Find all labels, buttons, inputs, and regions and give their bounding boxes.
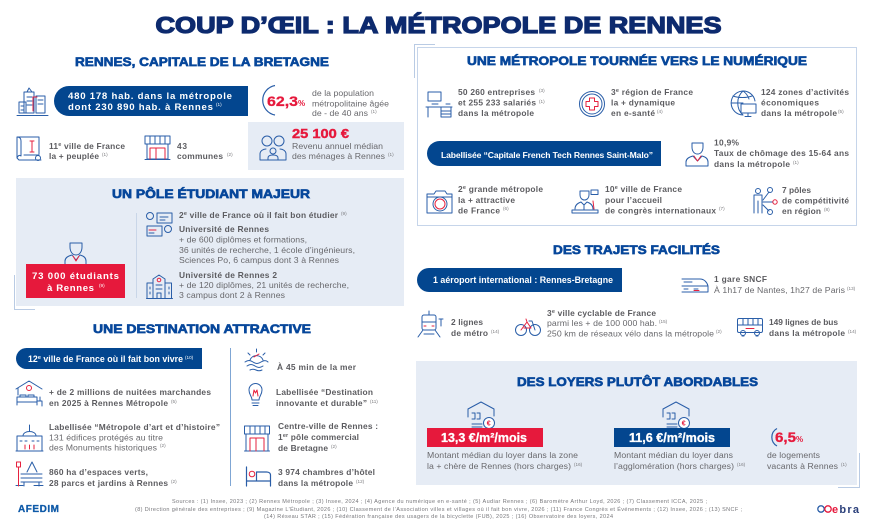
text: communes: communes xyxy=(177,151,223,161)
text: art et histoire: 131 édifices protégés au titre xyxy=(49,432,163,442)
text: entreprises: (1) xyxy=(539,99,545,104)
text: 11e ville: e xyxy=(58,142,61,148)
text: 25 100 €: (1) xyxy=(388,152,394,157)
banner: 12e ville: e xyxy=(38,355,41,361)
text: Université de Rennes: Sciences Po, 6 campus dont 3 à Rennes xyxy=(179,255,340,265)
text: agglomération: Montant médian du loyer dans xyxy=(614,450,734,460)
heading: trajets: DES TRAJETS FACILITÉS xyxy=(553,242,720,257)
stat: vélo xyxy=(516,308,722,338)
icon: bicycle xyxy=(516,319,540,336)
banner: population: (1) xyxy=(216,102,222,107)
logo: Cebra xyxy=(818,504,860,516)
callout: 73 000 étudiants: (9) xyxy=(99,283,105,288)
stat: centre-ville xyxy=(244,421,378,453)
text: 2e ville étudier: ville de France où il fait bon étudier xyxy=(187,210,339,220)
text: 25 100 €: Revenu annuel médian xyxy=(292,141,383,151)
stat: grande métropole xyxy=(427,184,543,216)
stat: métro xyxy=(418,311,500,338)
text: 2e ville étudier: 2 xyxy=(179,210,184,220)
heading: destination: UNE DESTINATION ATTRACTIVE xyxy=(93,322,311,336)
icon: high-speed train xyxy=(682,279,708,292)
stat: agglomération xyxy=(614,402,746,471)
stat: 6,5%: de logements xyxy=(767,450,821,460)
text: congrès: e xyxy=(615,185,618,191)
text: 2e ville étudier: e xyxy=(184,211,187,217)
text: métro: 2 lignes xyxy=(451,317,483,327)
text: vélo: e xyxy=(552,309,555,315)
text: congrès: ville de France xyxy=(618,184,682,194)
icon: camera xyxy=(427,191,452,213)
icon: student xyxy=(65,243,86,265)
text: grande métropole: e xyxy=(463,185,466,191)
stat: nuitées xyxy=(16,381,211,408)
icon: city buildings xyxy=(17,88,48,116)
stat: espaces verts xyxy=(16,462,177,488)
icon: metro xyxy=(418,311,443,337)
icon: park bench xyxy=(16,462,43,486)
text: pôles de compétitivité: 7 pôles xyxy=(782,185,811,195)
callout: 73 000 étudiants xyxy=(26,264,125,298)
text: agglomération: l’agglomération (hors charges) xyxy=(614,461,734,471)
stat: 62,3%: 62,3 xyxy=(267,93,298,109)
text: mer: À 45 min de la mer xyxy=(277,361,357,372)
text: e-santé: e xyxy=(616,88,619,94)
text: 11e ville: la + peuplée xyxy=(49,151,99,161)
text: pôles de compétitivité: en région xyxy=(782,206,821,216)
text: bus xyxy=(769,317,857,338)
text: grande métropole: de France xyxy=(458,206,500,216)
stat: mer xyxy=(245,349,357,372)
text: espaces verts xyxy=(49,467,177,488)
banner: French Tech: Labellisée “Capitale French Tech Rennes Saint-Malo” xyxy=(441,150,653,160)
stat: 62,3%: % xyxy=(298,99,305,108)
icon: blueprint xyxy=(17,137,41,160)
text: e-santé: 3 xyxy=(611,87,616,97)
text: chômage xyxy=(714,138,849,169)
text: chômage: dans la métropole xyxy=(714,159,790,169)
panel: Rennes, capitale de la Bretagne xyxy=(17,55,404,170)
text: art et histoire: des Monuments historiques xyxy=(49,442,158,452)
text: vélo xyxy=(547,308,722,338)
panel: Un pôle étudiant majeur xyxy=(14,178,404,310)
text: zones d'activités xyxy=(761,87,849,118)
text: entreprises xyxy=(458,87,545,118)
stat: pôles de compétitivité xyxy=(754,185,849,216)
panel: Une destination attractive xyxy=(16,322,378,488)
value: 13,3 €/m²/mois: 13,3 €/m²/mois xyxy=(441,431,527,445)
text: vélo: 3 xyxy=(547,308,552,318)
text: vélo: (15) xyxy=(659,319,668,324)
text: 25 100 € xyxy=(292,127,394,161)
icon: house with bed xyxy=(16,381,42,406)
text: e-santé xyxy=(611,87,693,118)
banner: 12e ville: ville de France où il fait bon vivre xyxy=(41,354,183,364)
logo: AFEDIM: AFEDIM xyxy=(18,504,59,515)
text: chômage: Taux de chômage des 15-64 ans xyxy=(714,148,849,158)
text: Université de Rennes 2: Université de Rennes 2 xyxy=(179,270,277,280)
text: grande métropole: la + attractive xyxy=(458,195,515,205)
stat: destination innovante xyxy=(249,384,378,408)
panel: revenu médian xyxy=(248,122,404,170)
stat: e-santé xyxy=(580,87,693,118)
icon: university building xyxy=(146,275,172,298)
text: zones d'activités: (5) xyxy=(838,109,844,114)
text: agglomération xyxy=(614,450,746,471)
text: Université de Rennes 2 xyxy=(179,270,349,300)
text: Université de Rennes xyxy=(179,224,355,265)
text: 25 100 €: 25 100 € xyxy=(292,127,349,141)
text: gare: 1 gare SNCF xyxy=(714,274,767,284)
icon: house with euro: € xyxy=(682,420,686,428)
banner: French Tech xyxy=(427,141,661,166)
title: COUP D’ŒIL : LA MÉTROPOLE DE RENNES xyxy=(156,11,722,38)
callout: 73 000 étudiants: à Rennes xyxy=(47,283,94,294)
text: art et histoire: (2) xyxy=(160,443,166,448)
icon: desk xyxy=(426,92,452,117)
text: chambres d'hôtel: dans la métropole xyxy=(278,478,353,488)
text: nuitées: + de 2 millions de nuitées marchandes xyxy=(49,387,211,397)
text: entreprises: dans la métropole xyxy=(458,108,534,118)
text: bus: 149 lignes de bus xyxy=(769,317,838,327)
text: 2e ville étudier: (9) xyxy=(341,211,347,216)
text: destination innovante xyxy=(276,387,378,408)
callout: 73 000 étudiants: 73 000 étudiants xyxy=(32,271,119,282)
text: Université de Rennes 2: + de 120 diplômes, 21 unités de recherche, xyxy=(179,280,349,290)
text: chambres d'hôtel: 3 974 chambres d’hôtel xyxy=(278,467,375,477)
icon: bus xyxy=(738,318,762,336)
text: 11e ville: 11 xyxy=(49,141,58,151)
stat: 6,5%: (1) xyxy=(841,462,847,467)
text: agglomération: (16) xyxy=(737,462,746,467)
panel: Une métropole tournée vers le numérique xyxy=(414,44,856,226)
banner: 12e ville: (10) xyxy=(185,355,194,360)
value: 11,6 €/m²/mois: 11,6 €/m²/mois xyxy=(629,431,715,445)
icon: sun over sea xyxy=(245,349,268,371)
text: 11e ville: ville de France xyxy=(62,141,125,151)
stat: 6,5%: 6,5 xyxy=(775,430,797,445)
stat: zones d'activités xyxy=(731,87,849,118)
text: e-santé: la + dynamique xyxy=(611,98,675,108)
text: espaces verts: 860 ha d’espaces verts, xyxy=(49,467,148,477)
text: congrès: de congrès internationaux xyxy=(605,206,716,216)
icon: light bulb xyxy=(249,384,262,406)
text: congrès: 10 xyxy=(605,184,615,194)
icon: medical cross xyxy=(580,92,604,116)
stat: bus xyxy=(738,317,857,338)
icon: shop xyxy=(244,426,270,451)
text: 11e ville xyxy=(49,141,125,161)
banner: aéroport: 1 aéroport international : Rennes-Bretagne xyxy=(433,275,613,285)
icon: monument xyxy=(16,425,43,451)
text: congrès: pour l’accueil xyxy=(605,195,662,205)
text: 25 100 €: des ménages à Rennes xyxy=(292,151,386,161)
banner: 12e ville xyxy=(16,348,202,369)
heading: Rennes capitale: RENNES, CAPITALE DE LA BRETAGNE xyxy=(75,55,329,69)
text: chambres d'hôtel xyxy=(278,467,375,488)
panel: Des trajets facilités xyxy=(417,242,857,338)
heading: numérique: UNE MÉTROPOLE TOURNÉE VERS LE NUMÉRIQUE xyxy=(467,53,807,68)
text: centre-ville: (2) xyxy=(331,444,337,449)
stat: chômage xyxy=(686,138,849,169)
text: métro xyxy=(451,317,500,338)
text: bus: dans la métropole xyxy=(769,328,845,338)
text: chômage: 10,9% xyxy=(714,138,740,148)
icon: house with euro xyxy=(468,402,494,428)
stat: 11e ville xyxy=(17,137,125,161)
text: nuitées: (5) xyxy=(171,399,177,404)
text: e-santé: région de France xyxy=(619,87,693,97)
text: nuitées xyxy=(49,387,211,408)
value: 13,3 €/m²/mois xyxy=(427,428,543,447)
stat: chambres d'hôtel xyxy=(246,467,375,488)
stat: 6,5%: vacants à Rennes xyxy=(767,461,839,471)
text: métro: (14) xyxy=(491,329,500,334)
text: destination innovante: innovante et durable” xyxy=(276,398,367,408)
banner: 12e ville: 12 xyxy=(28,354,38,364)
text: métro: de métro xyxy=(451,328,488,338)
stat: art et histoire xyxy=(16,422,220,452)
icon: storefront xyxy=(145,136,170,160)
text: congrès: (7) xyxy=(719,206,725,211)
text: bus: (14) xyxy=(848,329,857,334)
text: centre-ville: 1 xyxy=(278,432,283,442)
text: gare: (13) xyxy=(847,286,856,291)
text: communes: 43 xyxy=(177,141,187,151)
text: centre-ville: er xyxy=(283,433,289,439)
text: Université de Rennes 2: 3 campus dont 2 à Rennes xyxy=(179,290,286,300)
text: gare xyxy=(714,274,856,295)
logo: Cebra: ebra xyxy=(832,504,860,516)
icon: network xyxy=(754,188,777,214)
text: pôles de compétitivité xyxy=(782,185,849,216)
text: destination innovante: Labellisée “Destination xyxy=(276,387,373,397)
text: communes xyxy=(177,141,233,161)
text: gare: À 1h17 de Nantes, 1h27 de Paris xyxy=(714,285,846,295)
text: vélo: (2) xyxy=(716,329,722,334)
text: 11e ville: (1) xyxy=(102,152,108,157)
text: grande métropole xyxy=(458,184,543,216)
text: Université de Rennes: 36 unités de recherche, 1 école d’ingénieurs, xyxy=(179,245,355,255)
banner: population: 480 178 hab. dans la métropole xyxy=(68,91,232,102)
stat: congrès xyxy=(572,184,725,216)
text: centre-ville xyxy=(278,421,378,453)
icon: speech bubbles xyxy=(146,212,172,236)
text: vélo: parmi les + de 100 000 hab. xyxy=(547,318,657,328)
icon: speaker at lectern xyxy=(572,190,598,213)
icon: hotel bed xyxy=(246,467,270,486)
text: art et histoire: Labellisée “Métropole d’art et d’histoire” xyxy=(49,422,220,432)
heading: pôle étudiant: UN PÔLE ÉTUDIANT MAJEUR xyxy=(112,186,310,201)
text: vélo: ville cyclable de France xyxy=(555,308,656,318)
text: art et histoire xyxy=(49,422,220,452)
text: vélo: 250 km de réseaux vélo dans la métropole xyxy=(547,328,714,338)
stat: 62,3%: de la population xyxy=(312,88,374,98)
text: nuitées: en 2025 à Rennes Métropole xyxy=(49,398,168,408)
stat: 62,3%: de - de 40 ans xyxy=(312,108,369,118)
text: chômage: (1) xyxy=(793,160,799,165)
text: Université de Rennes: + de 600 diplômes et formations, xyxy=(179,234,307,244)
text: entreprises: 50 260 entreprises xyxy=(458,87,535,97)
text: chambres d'hôtel: (12) xyxy=(356,479,365,484)
stat: gare xyxy=(682,274,856,295)
text: e-santé: en e-santé xyxy=(611,108,655,118)
stat: 6,5% xyxy=(767,428,847,471)
text: centre-ville: de Bretagne xyxy=(278,443,328,453)
banner: population: dont 230 890 hab. à Rennes xyxy=(68,102,213,113)
text: Université de Rennes: Université de Rennes xyxy=(179,224,269,234)
stat: 62,3%: métropolitaine âgée xyxy=(312,98,389,108)
sources xyxy=(135,499,742,520)
stat: 62,3% xyxy=(263,86,389,118)
text: entreprises: et 255 233 salariés xyxy=(458,98,536,108)
stat: entreprises xyxy=(426,87,545,118)
heading: loyers: DES LOYERS PLUTÔT ABORDABLES xyxy=(517,374,758,389)
text: pôles de compétitivité: (8) xyxy=(824,207,830,212)
text: zones d'activités: 124 zones d’activités xyxy=(761,87,849,97)
icon: family xyxy=(260,136,286,160)
text: zones d'activités: économiques xyxy=(761,98,819,108)
banner: aéroport xyxy=(417,268,622,292)
sources: (14) Réseau STAR ; (15) Fédération française des usagers de la bicyclette (FUB), 2025 ; (16) Observatoire des loyers, 2024 xyxy=(264,514,613,520)
text: centre-ville: Centre-ville de Rennes : xyxy=(278,421,378,431)
text: pôles de compétitivité: de compétitivité xyxy=(782,196,849,206)
text: grande métropole: 2 xyxy=(458,184,463,194)
text: zone chère: Montant médian du loyer dans la zone xyxy=(427,450,578,460)
stat: zone la plus chère xyxy=(427,402,583,471)
text: zone chère xyxy=(427,450,583,471)
panel: Des loyers plutôt abordables xyxy=(416,361,860,488)
sources: (8) Direction générale des entreprises ; (9) Magazine L’Étudiant, 2026 ; (10) Classement de l’Association villes et villages où il fait bon vivre, 2026 ; (11) France Congrès et Événements ; (12) Insee, 2026 ; (13) SNCF ; xyxy=(135,506,742,513)
stat: 43 communes xyxy=(145,136,233,161)
text: espaces verts: (2) xyxy=(171,479,177,484)
text: grande métropole: grande métropole xyxy=(466,184,543,194)
icon: house with euro: € xyxy=(487,420,491,428)
text: zone chère: la + chère de Rennes (hors charges) xyxy=(427,461,571,471)
text: espaces verts: 28 parcs et jardins à Rennes xyxy=(49,478,168,488)
text: destination innovante: (11) xyxy=(370,399,378,404)
icon: person xyxy=(686,143,708,166)
text: entreprises: (3) xyxy=(539,88,545,93)
sources: Sources : (1) Insee, 2023 ; (2) Rennes Métropole ; (3) Insee, 2024 ; (4) Agence du numérique en e-santé ; (5) Audiar Rennes ; (6) Baromètre Arthur Loyd, 2026 ; (7) Classement ICCA, 2025 ; xyxy=(172,499,707,505)
text: centre-ville: pôle commercial xyxy=(288,432,359,442)
text: zone chère: (16) xyxy=(574,462,583,467)
banner: population xyxy=(54,86,248,116)
text: communes: (2) xyxy=(227,152,233,157)
text: zones d'activités: dans la métropole xyxy=(761,108,837,118)
stat: 62,3%: (1) xyxy=(371,109,377,114)
text: congrès xyxy=(605,184,725,216)
text: grande métropole: (6) xyxy=(503,206,509,211)
icon: globe and screen xyxy=(731,91,756,116)
text: e-santé: (4) xyxy=(657,109,663,114)
stat: 6,5%: % xyxy=(796,435,803,444)
